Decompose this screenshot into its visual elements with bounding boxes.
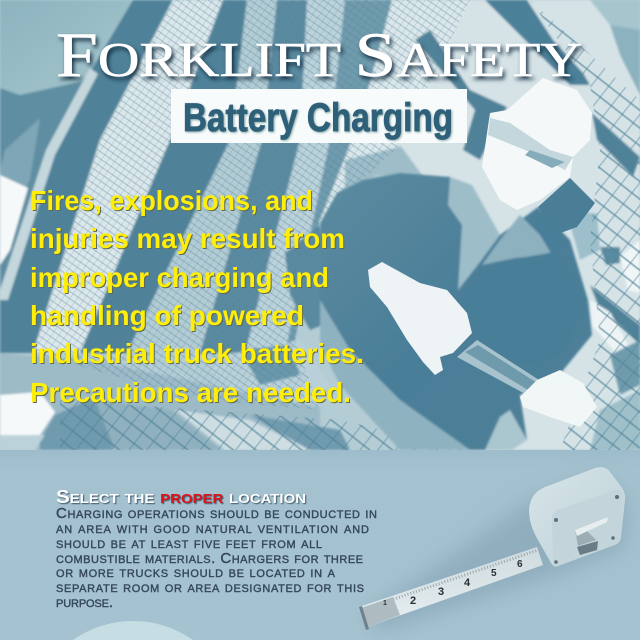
photo: gloved hands and wrench <box>368 262 597 427</box>
intro warning text <box>30 185 364 408</box>
photo: hatch texture <box>33 0 470 410</box>
tape measure <box>359 467 628 632</box>
tape blade: 1 <box>383 600 387 607</box>
intro warning text: industrial truck batteries. <box>30 338 364 369</box>
section body text: an area with good natural ventilation and <box>56 520 369 537</box>
section body text: combustible materials. Chargers for three <box>56 550 363 567</box>
intro warning text: improper charging and <box>30 262 329 293</box>
tape blade: 3 <box>438 586 444 598</box>
panel: select the proper location <box>0 450 640 640</box>
section body text: or more trucks should be located in a <box>56 564 336 581</box>
intro warning text: Precautions are needed. <box>30 377 351 408</box>
decorative circle <box>73 621 193 640</box>
photo: hard hat and face <box>482 78 595 235</box>
section body text: should be at least five feet from all <box>56 535 322 552</box>
tape blade: 2 <box>410 595 416 607</box>
section heading: Select the proper location <box>56 487 306 507</box>
subtitle banner: Battery Charging <box>183 96 453 140</box>
background photo: forklift operator <box>0 0 640 450</box>
photo: racking stripes <box>0 0 640 450</box>
intro warning text: Fires, explosions, and <box>30 185 313 216</box>
section body text <box>56 505 377 611</box>
photo: rack hatch texture <box>530 0 640 450</box>
intro warning text: handling of powered <box>30 300 304 331</box>
intro warning text: injuries may result from <box>30 223 345 254</box>
photo: lower floor texture <box>60 400 470 450</box>
tape blade <box>359 547 543 630</box>
tape case <box>529 467 625 567</box>
title: FORKLIFT SAFETY <box>56 19 582 90</box>
tape blade: 6 <box>517 559 523 570</box>
tape blade: 5 <box>491 568 497 579</box>
tape blade: 4 <box>464 577 471 589</box>
section body text: Charging operations should be conducted in <box>56 505 377 522</box>
section body text: separate room or area designated for this <box>56 579 364 596</box>
photo: lower-left band <box>0 353 320 450</box>
photo: top right white racks <box>400 0 640 450</box>
photo: worker jacket <box>320 173 592 450</box>
section body text: purpose. <box>56 594 113 611</box>
